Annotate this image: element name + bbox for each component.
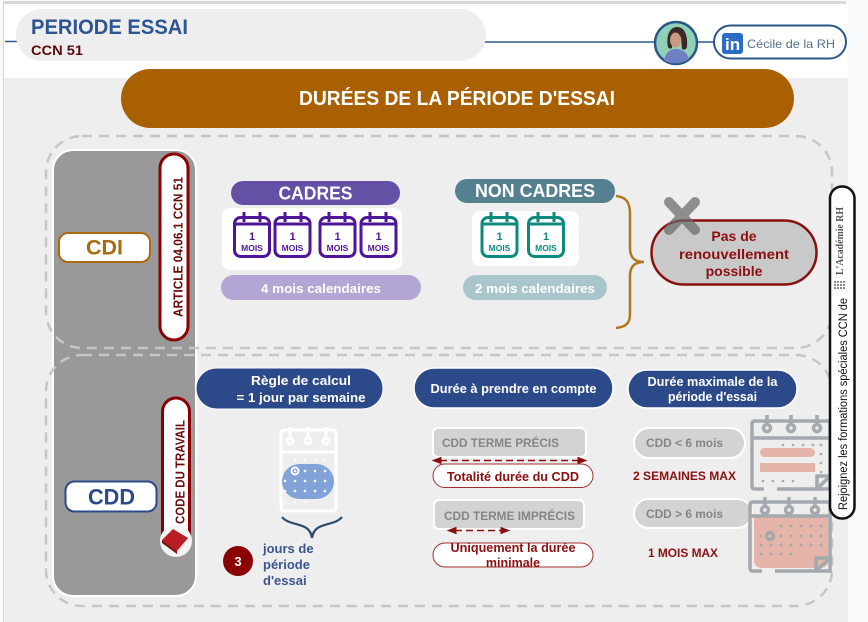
brace — [616, 196, 644, 328]
calendars: four months: MOIS — [241, 243, 263, 253]
minimum duration — [433, 541, 593, 570]
CDI label: CDI — [86, 236, 123, 260]
code du travail reference — [162, 398, 190, 548]
grey side panel — [53, 150, 196, 596]
side promo: training — [830, 186, 854, 518]
icon: white calendar — [281, 427, 336, 511]
heading: calculation rule: = 1 jour par semaine — [236, 391, 366, 405]
LinkedIn badge: in — [725, 35, 740, 54]
result: three days: 3 — [234, 554, 242, 569]
callout: no renewal: possible — [706, 263, 763, 279]
cadres duration: 4 mois calendaires — [261, 281, 381, 296]
calendars: four months: MOIS — [282, 243, 304, 253]
icon: calendar one month — [750, 497, 830, 571]
side promo: training: Rejoignez les formations spéciales CCN de — [838, 298, 850, 510]
one month maximum: 1 MOIS MAX — [648, 546, 718, 560]
cadres duration — [221, 275, 421, 300]
callout: no renewal — [652, 220, 816, 284]
open term contract — [434, 500, 584, 529]
minimum duration: Uniquement la durée — [450, 541, 576, 555]
full duration: Totalité durée du CDD — [447, 470, 579, 484]
callout: no renewal: Pas de — [711, 228, 757, 244]
calendars: four months: MOIS — [327, 243, 349, 253]
heading: calculation rule: Règle de calcul — [251, 374, 351, 388]
dashed frame: CDI — [46, 136, 832, 348]
full duration — [433, 464, 593, 488]
under six months — [634, 428, 745, 458]
CDD label — [66, 482, 156, 512]
arrow: short span — [448, 528, 509, 534]
header line — [5, 40, 716, 43]
arrow: full span — [433, 458, 586, 464]
non cadres duration — [463, 275, 607, 300]
LinkedIn badge: Cécile de la RH — [747, 37, 835, 51]
under six months: CDD < 6 mois — [646, 436, 723, 450]
calendars: two months: MOIS — [535, 243, 557, 253]
result: three days: période — [263, 557, 310, 572]
calendars: four months: 1 — [249, 231, 255, 243]
result: three days: jours de — [262, 541, 314, 556]
article reference — [160, 154, 188, 340]
fixed term contract: CDD TERME PRÉCIS — [442, 435, 559, 450]
over six months — [634, 499, 752, 528]
main banner — [121, 69, 794, 128]
calendars: four months: 1 — [334, 231, 341, 243]
heading: maximum duration: période d'essai — [668, 390, 757, 404]
callout: no renewal: renouvellement — [679, 246, 789, 262]
cadres heading — [231, 181, 400, 205]
article reference: ARTICLE 04.06.1 CCN 51 — [172, 177, 186, 317]
panel: non cadres — [455, 179, 615, 300]
author portrait — [655, 22, 697, 64]
panel: cadres — [221, 181, 421, 300]
calendars: two months: MOIS — [489, 243, 511, 253]
heading: maximum duration: Durée maximale de la — [648, 375, 779, 389]
heading: maximum duration — [628, 370, 797, 408]
non cadres heading: NON CADRES — [475, 181, 595, 201]
title block: CCN 51 — [31, 42, 83, 58]
LinkedIn badge — [714, 26, 846, 58]
dashed frame: CDD — [46, 355, 832, 606]
result: three days — [223, 541, 314, 588]
two weeks maximum: 2 SEMAINES MAX — [633, 469, 736, 483]
cadres heading: CADRES — [278, 184, 352, 204]
calendars: two months: 1 — [496, 231, 503, 243]
icon: red book — [160, 525, 192, 557]
non cadres duration: 2 mois calendaires — [475, 281, 595, 296]
fixed term contract — [433, 428, 586, 457]
side promo: training: L'Académie RH — [834, 207, 846, 275]
over six months: CDD > 6 mois — [646, 507, 723, 521]
brace: calendar to result — [282, 517, 342, 538]
open term contract: CDD TERME IMPRÉCIS — [444, 508, 575, 523]
heading: duration to consider: Durée à prendre en compte — [430, 382, 597, 396]
calendars: two months — [472, 211, 579, 266]
heading: calculation rule — [196, 368, 383, 409]
result: three days: d'essai — [263, 573, 307, 588]
main banner: DURÉES DE LA PÉRIODE D'ESSAI — [299, 87, 615, 110]
minimum duration: minimale — [486, 556, 540, 570]
calendars: four months: 1 — [375, 231, 382, 243]
non cadres heading — [455, 179, 615, 203]
calendars: four months: 1 — [289, 231, 296, 243]
icon: cross — [669, 202, 695, 230]
CDD label: CDD — [88, 484, 135, 510]
code du travail reference: CODE DU TRAVAIL — [172, 420, 188, 524]
title block: PERIODE ESSAI — [31, 16, 188, 39]
calendars: four months: MOIS — [368, 243, 390, 253]
title block — [16, 9, 486, 61]
calendars: four months — [222, 208, 402, 270]
heading: duration to consider — [414, 368, 613, 408]
CDI label — [59, 233, 150, 262]
icon: calendar two weeks — [752, 415, 830, 489]
calendars: two months: 1 — [543, 231, 549, 243]
